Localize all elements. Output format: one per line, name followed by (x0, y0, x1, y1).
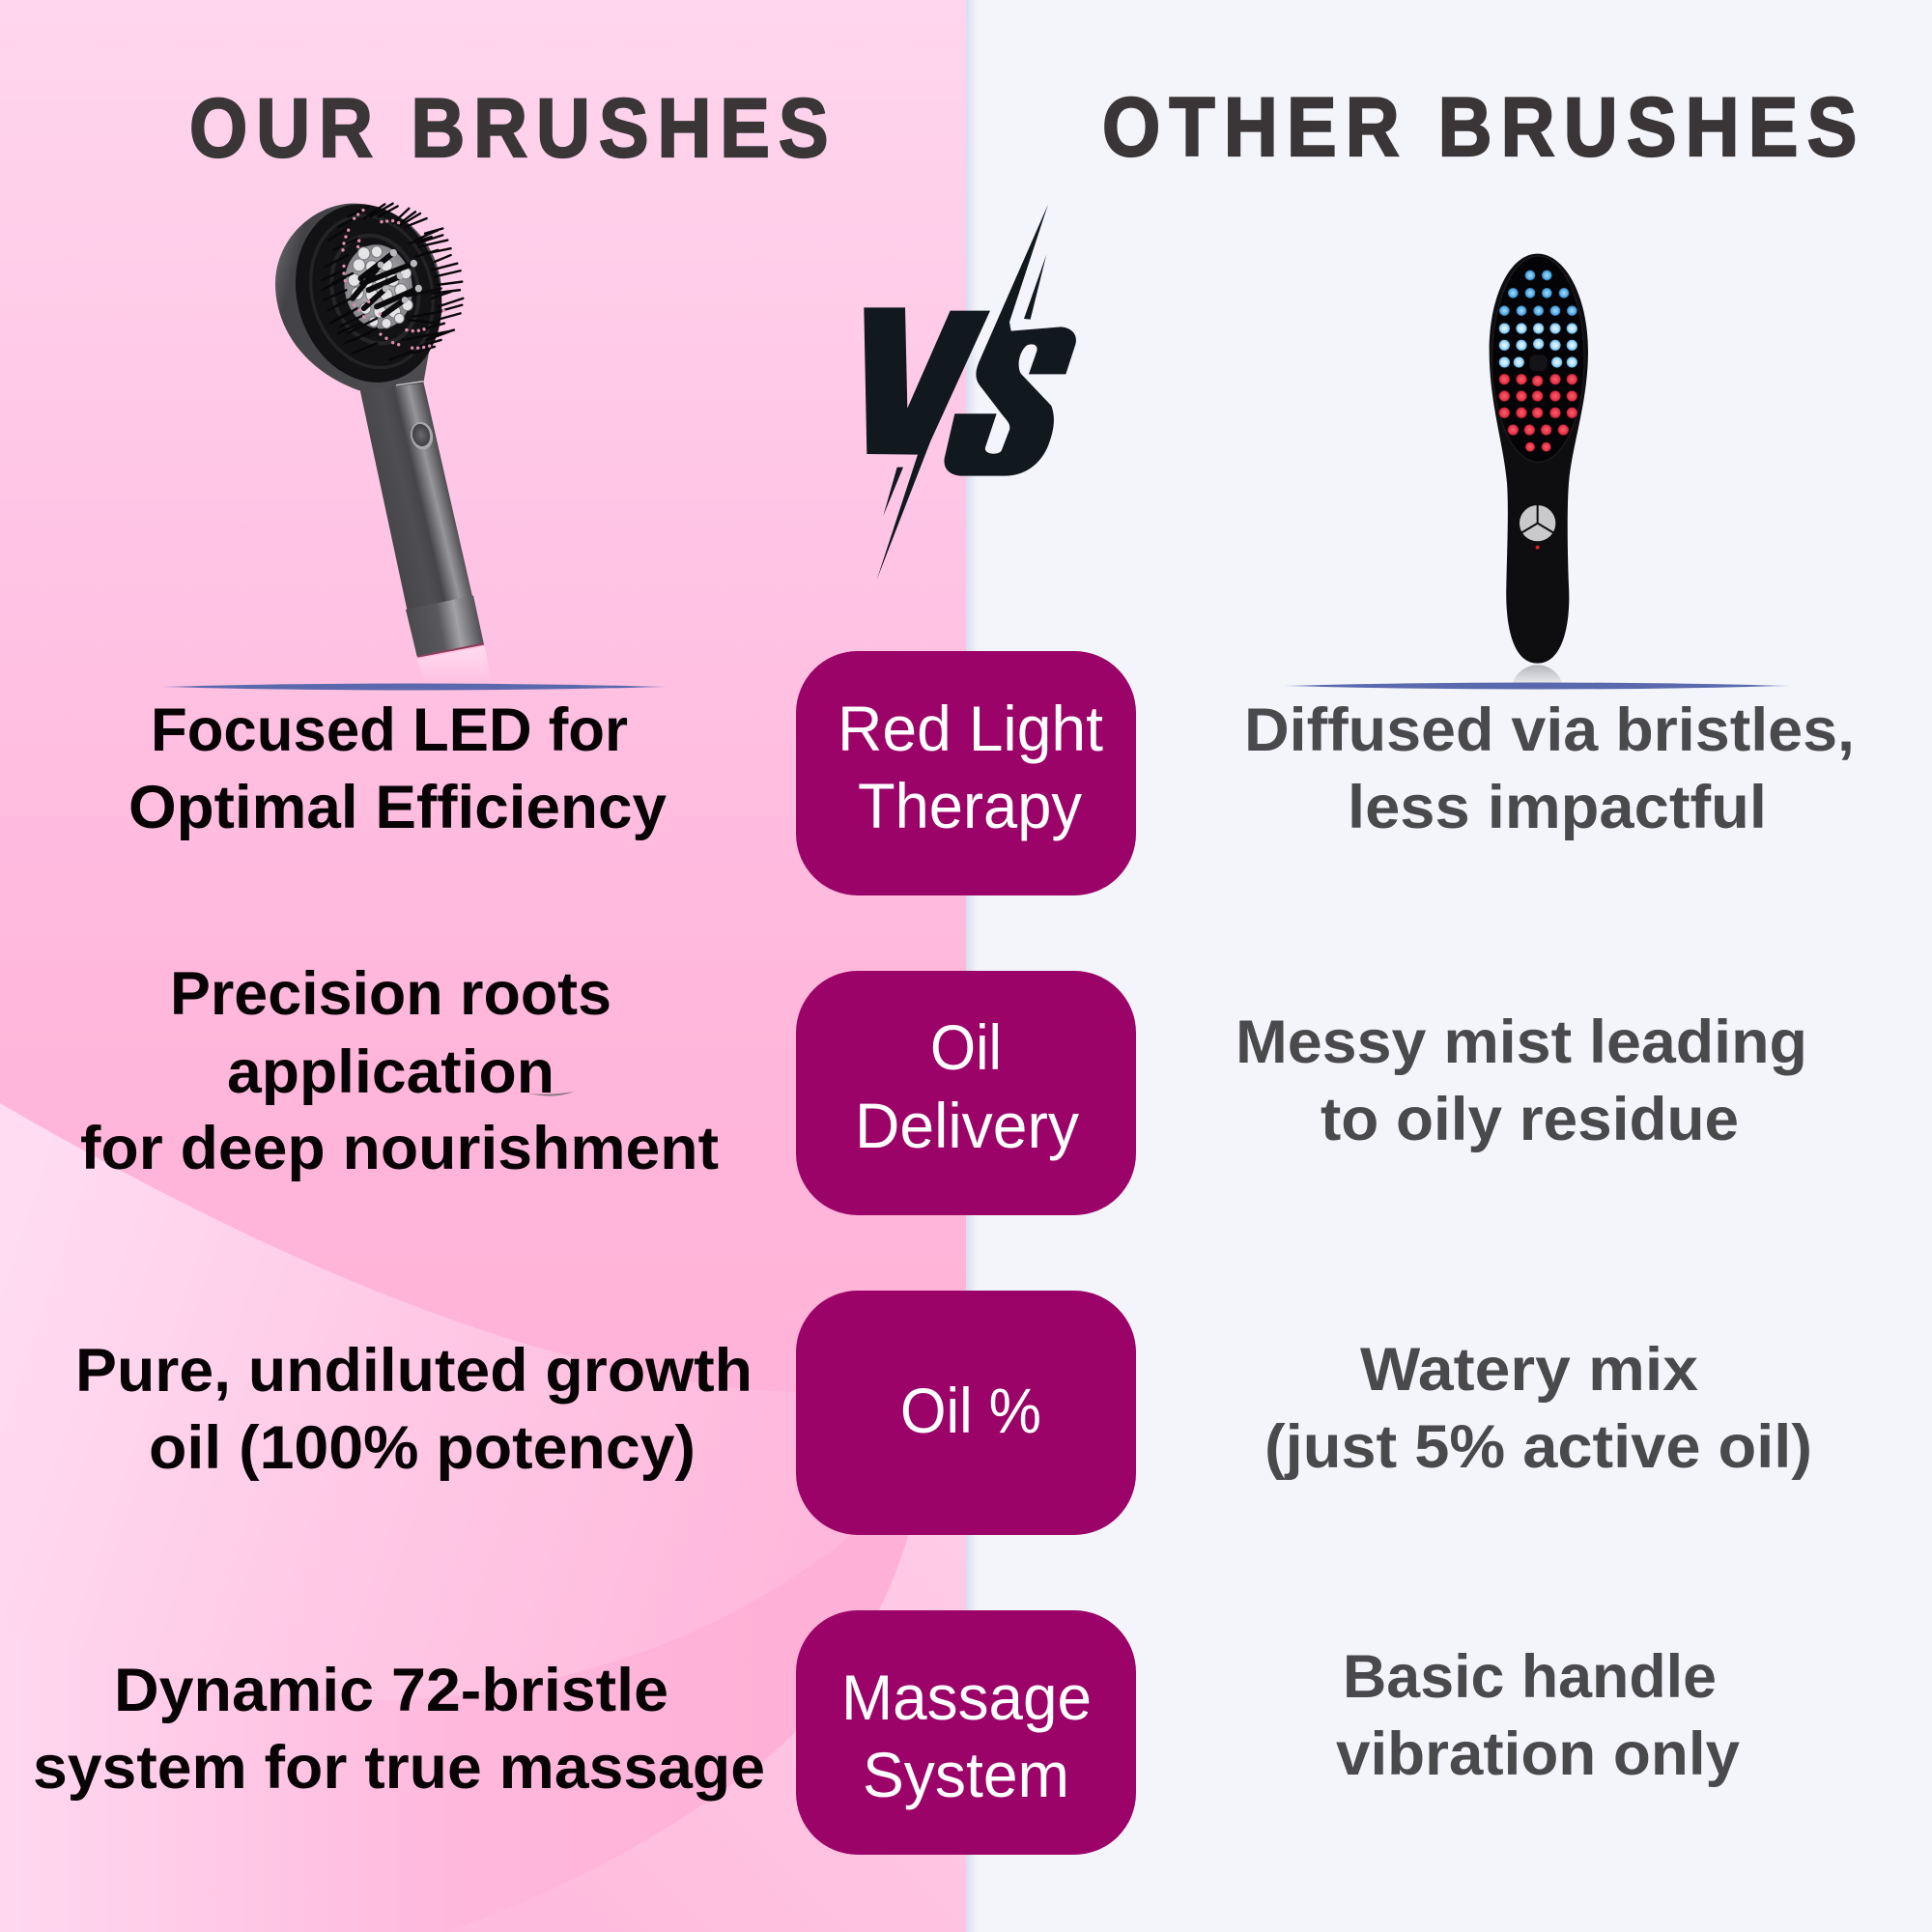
text: other oil delivery (1236, 1009, 1807, 1153)
image: other brush (1490, 254, 1588, 685)
text: other massage system: vibration only (1336, 1720, 1740, 1788)
text: our oil percent (75, 1337, 753, 1482)
text: our oil percent: Pure, undiluted growth (75, 1337, 753, 1405)
text: other red light: Diffused via bristles, (1244, 696, 1855, 764)
letter V with lower spike (864, 307, 990, 580)
text: our red light (128, 696, 667, 841)
pill: oil delivery (796, 971, 1136, 1215)
text: our oil delivery: application (227, 1038, 554, 1106)
panel: left pink background (0, 0, 966, 1932)
pill: massage system: System (863, 1739, 1069, 1810)
text: other oil percent (1264, 1336, 1812, 1481)
head panel (1492, 256, 1584, 462)
pill: oil delivery: Delivery (855, 1090, 1079, 1161)
handle (360, 382, 483, 656)
text: other red light: less impactful (1348, 774, 1767, 841)
control button (1520, 505, 1555, 541)
silver core (338, 239, 418, 334)
lower small spike (883, 468, 903, 516)
text: our red light: Focused LED for (151, 696, 628, 764)
pill: red light therapy: Red Light (838, 693, 1103, 764)
upper small spike (1024, 254, 1046, 320)
pill: red light therapy: Therapy (858, 770, 1082, 841)
hexagon pattern (348, 246, 412, 328)
pink LED dots (341, 209, 445, 350)
heading: our brushes: OUR BRUSHES (189, 82, 829, 175)
text: our red light: Optimal Efficiency (128, 774, 667, 841)
text: our massage system: Dynamic 72-bristle (114, 1657, 668, 1724)
bristle pad (273, 185, 464, 402)
text: our oil delivery (80, 960, 719, 1182)
text: other oil delivery: to oily residue (1321, 1086, 1739, 1153)
text: our oil delivery: for deep nourishment (80, 1115, 719, 1182)
letter S with upper spike (944, 205, 1076, 476)
panel: right background (966, 0, 1932, 1932)
text: other oil percent: (just 5% active oil) (1264, 1413, 1812, 1481)
underline: other brushes (1284, 682, 1790, 690)
pill: oil percent: Oil % (900, 1375, 1041, 1446)
pill: massage system (796, 1610, 1136, 1855)
blue LEDs (1499, 270, 1577, 316)
text: our massage system: system for true massage (33, 1734, 765, 1802)
power button (408, 419, 436, 452)
reflection (1512, 665, 1562, 685)
text: our oil delivery: Precision roots (170, 960, 611, 1028)
pill: oil delivery: Oil (930, 1011, 1002, 1083)
image: our brush (273, 185, 491, 683)
underline: our brushes (160, 684, 667, 690)
handle cap (406, 595, 484, 656)
body (1490, 254, 1588, 664)
text: our oil percent: oil (100% potency) (149, 1414, 696, 1482)
text: other red light (1244, 696, 1855, 841)
pill: red light therapy (796, 651, 1136, 895)
text: other oil delivery: Messy mist leading (1236, 1009, 1807, 1076)
text: other oil percent: Watery mix (1360, 1336, 1698, 1404)
dark sensor (1529, 355, 1548, 371)
reflection (417, 646, 491, 683)
massage rods (353, 253, 418, 315)
indicator light (1536, 546, 1540, 550)
head body (275, 204, 441, 390)
heading: other brushes: OTHER BRUSHES (1102, 81, 1857, 174)
text: our massage system (33, 1657, 765, 1802)
pill: oil percent (796, 1291, 1136, 1535)
red LEDs (1499, 374, 1577, 452)
bristles (322, 204, 463, 360)
pill: massage system: Massage (841, 1662, 1092, 1733)
icon: VS lightning logo (864, 205, 1076, 580)
text: other massage system (1336, 1643, 1740, 1788)
text: other massage system: Basic handle (1343, 1643, 1717, 1711)
